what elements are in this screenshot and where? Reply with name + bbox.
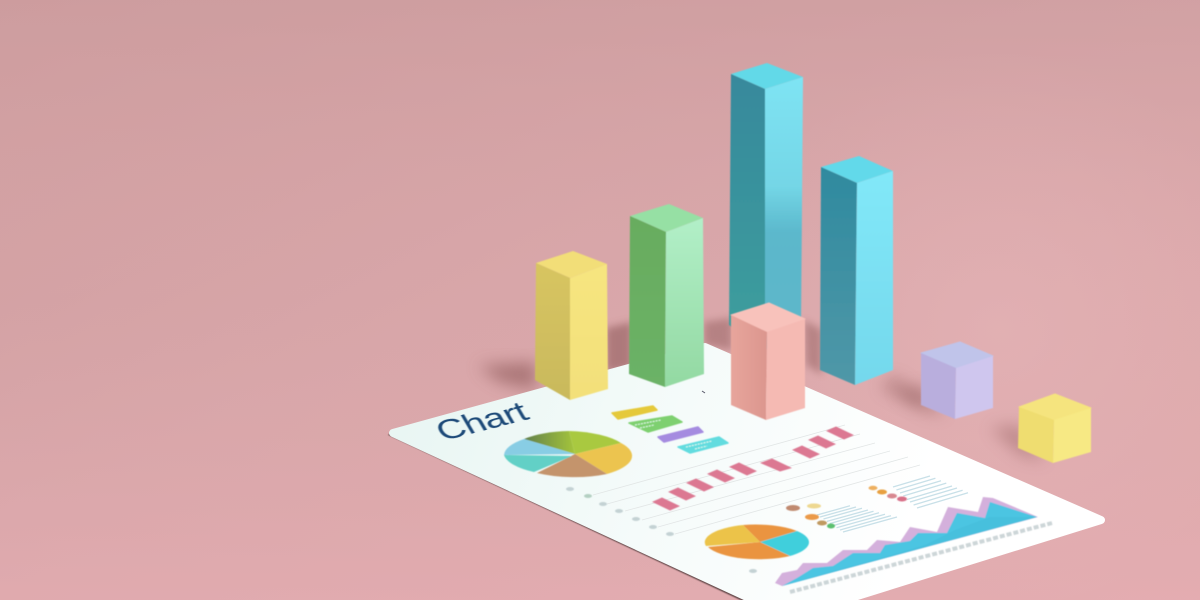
axis labels — [790, 523, 1052, 592]
cube: yellow — [1018, 394, 1091, 463]
area chart — [775, 497, 1052, 592]
floor shadows — [478, 318, 1045, 462]
legend text block: right — [868, 476, 968, 508]
legend text block: middle — [786, 504, 897, 532]
heading: Chart: Chart — [430, 396, 535, 447]
paper thickness edge — [388, 431, 800, 600]
paper sheet — [388, 347, 1101, 600]
legend dots — [786, 504, 835, 528]
cube: lavender — [921, 342, 993, 419]
tick mark — [702, 391, 705, 393]
pie chart: bottom — [705, 525, 809, 559]
bar: yellow — [535, 251, 608, 400]
legend dots — [868, 486, 907, 502]
grid lines — [593, 425, 920, 534]
axis labels — [566, 487, 757, 573]
legend pills — [612, 406, 728, 453]
bar: right teal — [820, 156, 893, 385]
bar: tall teal — [729, 63, 803, 350]
pink bars — [652, 426, 854, 510]
pie chart: top — [504, 431, 632, 477]
bar: pink — [731, 303, 805, 420]
bar: green — [629, 204, 704, 387]
bar chart on paper — [566, 425, 920, 573]
